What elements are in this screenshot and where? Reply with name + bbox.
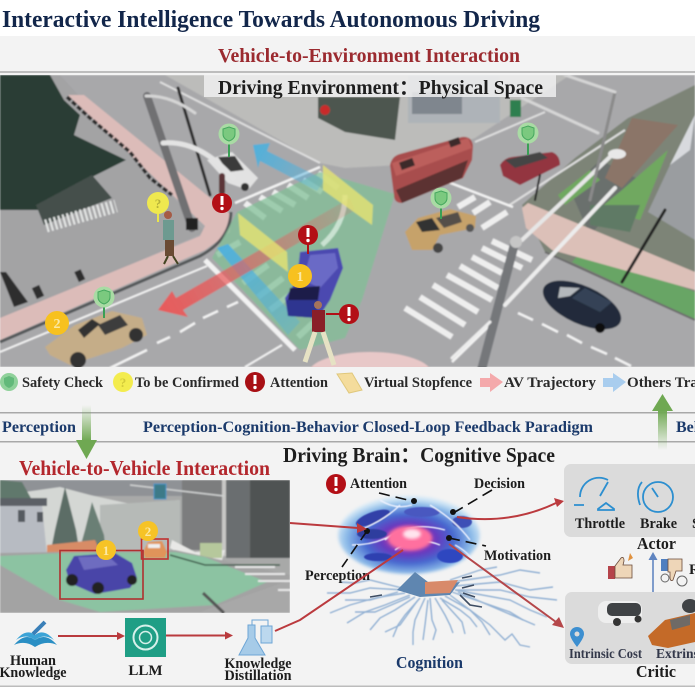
street light left [146,88,233,228]
red car [500,152,560,185]
arrow: photo to brain [290,523,367,533]
street light right [452,75,665,368]
label: cognition: Cognition [396,653,464,672]
marker: safety check left car [94,286,114,318]
leader lines [342,490,492,567]
orange car [143,541,167,558]
label: motivation: Motivation [484,548,552,564]
panel: actor [564,464,695,537]
legend [0,372,695,393]
hedge zigzag [67,97,172,195]
legend: AV trajectory: AV Trajectory [504,375,597,391]
icon: thumbs up [608,553,633,579]
marker: to be confirmed pedestrian [147,192,169,222]
blue car [66,553,137,594]
green lawn [572,257,695,319]
label: human knowledge: Knowledge [0,665,67,681]
circuit fan [327,567,557,647]
badge 2 [138,521,158,541]
marker: attention at police car [212,193,232,213]
icon: location pin [570,627,584,647]
green perception zone [212,172,395,350]
bollards [0,269,85,307]
legend: virtual stopfence: Virtual Stopfence [364,375,472,391]
right block [522,85,695,292]
label: throttle: Throttle [575,516,625,532]
label: perception: Perception [2,419,76,436]
icon: brake [638,482,673,512]
legend: safety check [0,373,104,391]
panel: driving environment physical space scene [0,75,695,396]
legend: attention: Attention [270,375,329,391]
pink sidewalk [0,95,230,340]
traffic light box [130,484,224,499]
trees [0,75,126,210]
road markings [0,167,631,368]
top sidewalk and block [165,75,570,168]
icon: flask [239,620,272,655]
icon: thumbs down [661,559,687,586]
virtual stopfence right [323,165,373,225]
marker: number 2: 2 [54,317,60,332]
icon: autonomous shuttle [598,601,642,626]
plaza left [0,75,205,322]
label: knowledge distillation: Distillation [224,668,292,684]
green perception zone [0,552,267,612]
marker: safety check tan car [430,188,452,219]
label: LLM: LLM [128,663,163,679]
legend: to be confirmed: ? [120,375,126,390]
marker: to be confirmed pedestrian: ? [155,196,161,211]
road surface [0,550,290,613]
others trajectory arrow lower [217,244,300,335]
badge 1: 1 [103,543,109,558]
marker: attention at blue car [298,225,318,254]
label: brake: Brake [640,516,677,532]
legend: attention [245,372,329,392]
caption background [204,75,556,97]
icon: attention [326,474,346,494]
label: perception: Perception [305,568,371,584]
crosswalk stripes [217,173,532,337]
label: closed-loop paradigm: Perception-Cognition-Behavior Closed-Loop Feedback Paradigm [143,419,594,436]
arrow: perception down [76,405,97,459]
pedestrian waiting [163,211,178,264]
marker: number 1: 1 [296,270,304,285]
curb [0,212,231,342]
pink strip [522,203,695,290]
virtual stopfence left [238,213,288,272]
title: Interactive Intelligence Towards Autonomous Driving [2,7,540,33]
heading: vehicle-to-vehicle interaction: Vehicle-to-Vehicle Interaction [19,456,270,480]
arrow: brain to critic [449,544,564,628]
box around car 1 [60,550,143,599]
tan car right [405,209,476,253]
legend: safety check: Safety Check [22,375,104,391]
legend: virtual stopfence [337,373,472,393]
bus [390,137,473,203]
bottom edge [0,686,695,694]
white fence [46,206,116,226]
heading: vehicle-to-environment interaction: Vehicle-to-Environment Interaction [218,45,520,67]
label: actor: Actor [637,534,676,553]
legend: to be confirmed: To be Confirmed [135,375,240,391]
arrow: LLM to distillation [166,632,233,640]
label: critic: Critic [636,662,676,681]
legend: to be confirmed [113,372,240,392]
AV trajectory arrow [158,198,355,317]
label: knowledge distillation [224,656,292,684]
chip [397,572,460,597]
circuit accents [370,576,482,607]
pedestrian walking [305,301,334,365]
label: human knowledge: Human [10,653,57,669]
panel: critic [565,592,695,664]
legend: AV trajectory [480,373,597,392]
leader dots [364,498,456,541]
brain [338,496,480,597]
marker: number 1 [288,264,312,288]
label: attention: Attention [350,476,408,492]
arrow: behavior up [652,394,673,450]
heading: driving environment: Driving Environment：Physical Space [218,77,543,99]
arrow: brain to actor [457,498,564,519]
icon: throttle [574,478,614,510]
box around car 2 [142,539,168,559]
title band [0,0,695,36]
marker: attention at pedestrian [326,304,359,324]
marker: number 2 [45,311,69,335]
road edges [475,112,545,142]
panel: vehicle-to-vehicle photo [0,480,290,613]
blue main car [285,248,343,318]
others trajectory arrow upper [253,143,325,191]
badge 2: 2 [145,524,151,539]
pink corner bottom [311,351,429,367]
heading: driving brain: Driving Brain：Cognitive Space [283,443,555,467]
label: knowledge distillation: Knowledge [224,656,292,672]
building at top [317,92,500,140]
arrow: knowledge to LLM [58,632,125,640]
legend: others trajectory [603,373,695,392]
icon: orange car [648,599,695,648]
road surface [0,75,695,367]
label: decision: Decision [474,476,526,492]
badge 1 [96,540,116,560]
marker: safety check police car [218,124,240,157]
label: human knowledge [0,653,67,681]
tan car left [45,311,147,368]
icon: human knowledge book [14,622,57,647]
divider band [0,412,695,442]
icon: LLM [125,618,166,657]
marker: safety check red car [518,122,538,155]
dark car [542,280,622,334]
arrow: distillation to brain [275,550,403,631]
label: intrinsic cost: Intrinsic Cost [569,646,642,661]
arrow: critic to actor [648,552,658,592]
police car [207,152,258,191]
